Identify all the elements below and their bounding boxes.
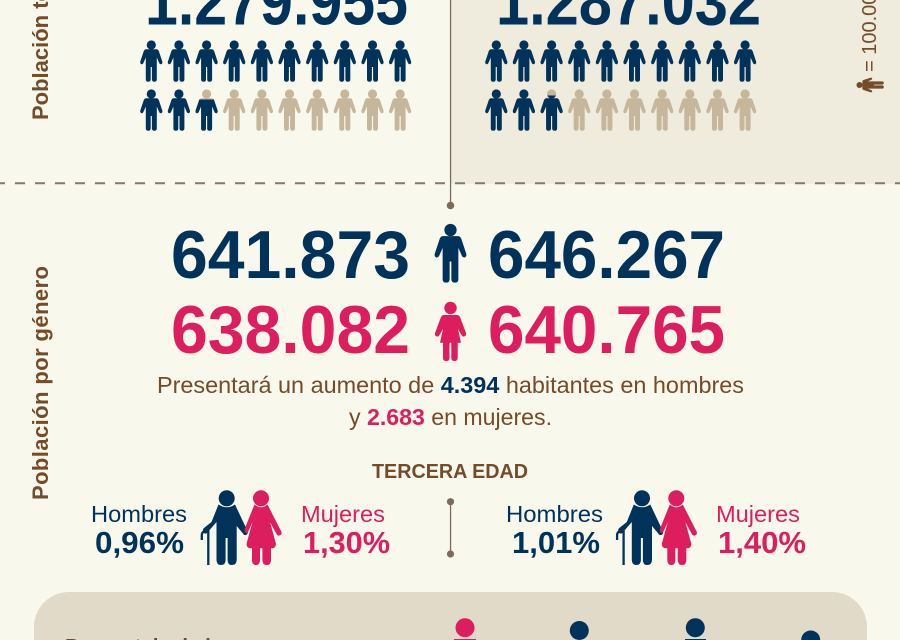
icon: woman [435, 302, 466, 361]
vertical timeline divider [447, 0, 454, 209]
label: mujeres left: Mujeres [301, 501, 385, 527]
label: mujeres right: Mujeres [716, 501, 800, 527]
icon: navy person head 3 [801, 630, 820, 640]
summary line 1: Presentará un aumento de 4.394 habitantes en hombres [157, 372, 744, 398]
row 1 right people [485, 40, 756, 82]
heading: tercera edad: TERCERA EDAD [372, 461, 528, 483]
male count left: 641.873 [171, 217, 410, 293]
male count right: 646.267 [488, 217, 725, 293]
summary text [157, 372, 744, 430]
heading: population by gender (rotated): Población por género [28, 266, 53, 500]
stat group: tercera edad right [506, 490, 806, 565]
icon: elderly woman left [244, 490, 282, 565]
legend: one icon equals 100.000 [856, 0, 884, 92]
row 2 right people in navy [485, 89, 535, 131]
panel: bottom age distribution [34, 592, 867, 640]
value: hombres left: 0,96% [95, 525, 184, 560]
label: hombres right: Hombres [506, 501, 603, 527]
panel background [34, 592, 867, 640]
value: hombres right: 1,01% [512, 525, 600, 560]
pictogram: left column people [140, 40, 411, 131]
icon: elderly man right [617, 490, 663, 565]
row 2 left people in tan [195, 89, 411, 131]
row 2 right people in tan [540, 89, 756, 131]
icon: pink person head [454, 618, 476, 640]
female count left: 638.082 [171, 292, 410, 368]
label: hombres left: Hombres [91, 501, 187, 527]
partially filled left person [196, 100, 218, 131]
icon: navy person head 2 [685, 618, 706, 640]
icon: elderly woman right [660, 490, 697, 565]
partially filled right person [540, 96, 563, 131]
icon: elderly man left [202, 490, 248, 565]
icon: legend person [856, 78, 884, 92]
female count right: 640.765 [488, 292, 725, 368]
icon: man [435, 224, 466, 283]
tercera edad divider [447, 498, 454, 558]
value: mujeres left: 1,30% [303, 525, 390, 560]
dashed section divider [0, 182, 900, 184]
panel: right top column background [451, 0, 900, 184]
value: mujeres right: 1,40% [718, 525, 806, 560]
pictogram: right column people [485, 40, 756, 131]
row 1 left people [140, 40, 411, 82]
stat group: tercera edad left [91, 490, 390, 565]
row 2 left people in navy [140, 89, 190, 131]
icon: navy person head 1 [570, 621, 589, 640]
summary line 2: y 2.683 en mujeres. [349, 404, 552, 430]
